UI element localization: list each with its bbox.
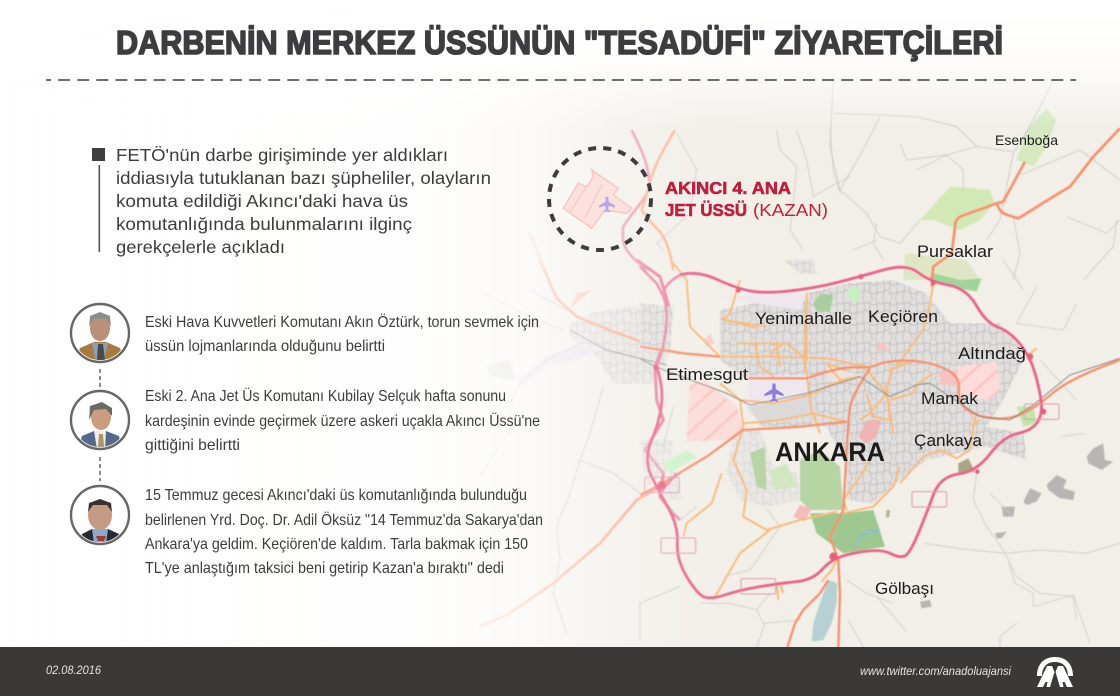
- map place labels: Mamak: [921, 389, 979, 408]
- motorway ring road: [647, 267, 1042, 598]
- footer bar: [0, 647, 1120, 696]
- intro text block: [92, 145, 491, 257]
- label: Akıncı 4. Ana Jet Üssü: [665, 178, 828, 220]
- map place labels: Pursaklar: [917, 242, 993, 261]
- title divider: [46, 79, 1076, 81]
- map place labels: Esenboğa: [995, 132, 1058, 148]
- intro paragraph: FETÖ'nün darbe girişiminde yer aldıkları: [116, 145, 448, 165]
- map place labels: Çankaya: [914, 431, 983, 450]
- map place labels: Altındağ: [958, 344, 1026, 363]
- statement: Adil Öksüz: TL'ye anlaştığım taksici beni getirip Kazan'a bıraktı" dedi: [145, 560, 504, 577]
- map place labels: ANKARA: [775, 437, 885, 467]
- label: Akıncı 4. Ana Jet Üssü: (KAZAN): [753, 200, 828, 220]
- Lake Mogan: [812, 580, 837, 642]
- dashed circle: [549, 148, 651, 250]
- statement: Adil Öksüz: Ankara'ya geldim. Keçiören'de kaldım. Tarla bakmak için 150: [145, 536, 528, 553]
- icon: Anadolu Agency logo: [1037, 657, 1073, 687]
- map region: Ankara city: [640, 260, 1120, 647]
- statement: Kubilay Selçuk: gittiğini belirtti: [145, 437, 240, 454]
- statement: Adil Öksüz: [145, 487, 543, 577]
- orange roads: [673, 263, 1037, 600]
- lakes and hills, east: [886, 443, 1113, 608]
- Akıncı air base marker: [549, 148, 651, 250]
- secondary roads: [640, 260, 1120, 647]
- label: Akıncı 4. Ana Jet Üssü: AKINCI 4. ANA: [665, 178, 791, 198]
- map fades to white on the left and top: [0, 78, 720, 647]
- bullet line: [98, 165, 100, 252]
- statement: Kubilay Selçuk: [145, 387, 540, 454]
- bullet square: [92, 148, 105, 161]
- statement: Kubilay Selçuk: kardeşinin evinde geçirmek üzere askeri uçakla Akıncı Üssü'ne: [145, 412, 540, 430]
- statement: Akın Öztürk: üssün lojmanlarında olduğunu belirtti: [145, 338, 385, 355]
- icon: Etimesgut airfield plane: [764, 383, 784, 402]
- icon: plane: [599, 197, 615, 212]
- date: 02.08.2016: [46, 665, 102, 677]
- intro paragraph: gerekçelerle açıkladı: [116, 237, 285, 257]
- intro paragraph: komutanlığında bulunmalarını ilginç: [116, 214, 412, 234]
- intro paragraph: [116, 145, 491, 257]
- statement: Adil Öksüz: 15 Temmuz gecesi Akıncı'daki üs komutanlığında bulunduğu: [145, 487, 527, 504]
- twitter address: www.twitter.com/anadoluajansi: [860, 664, 1011, 678]
- portrait: Kubilay Selçuk: [71, 391, 129, 449]
- map place labels: [666, 132, 1058, 598]
- portrait: Adil Öksüz: [71, 486, 129, 544]
- base footprint: [563, 170, 632, 228]
- map region: Kazan surroundings: [530, 130, 850, 270]
- label: Akıncı 4. Ana Jet Üssü: JET ÜSSÜ: [665, 200, 747, 220]
- intro paragraph: komuta edildiği Akıncı'daki hava üs: [116, 191, 408, 211]
- map region: western and northern outskirts: [480, 260, 680, 640]
- connector dashes between portraits: [99, 369, 101, 481]
- portrait: Akın Öztürk: [71, 304, 129, 362]
- intro paragraph: iddiasıyla tutuklanan bazı şüpheliler, olayların: [116, 168, 491, 188]
- statement: Akın Öztürk: Eski Hava Kuvvetleri Komutanı Akın Öztürk, torun sevmek için: [145, 313, 539, 331]
- map place labels: Gölbaşı: [875, 579, 934, 598]
- trunk roads: [640, 267, 1120, 647]
- map place labels: Etimesgut: [666, 365, 748, 384]
- statement: Kubilay Selçuk: Eski 2. Ana Jet Üs Komutanı Kubilay Selçuk hafta sonunu: [145, 387, 506, 405]
- statement: Adil Öksüz: belirlenen Yrd. Doç. Dr. Adil Öksüz "14 Temmuz'da Sakarya'dan: [145, 511, 543, 529]
- title: DARBENİN MERKEZ ÜSSÜNÜN "TESADÜFİ" ZİYARETÇİLERİ: [116, 24, 1003, 61]
- statement: Akın Öztürk: [145, 313, 539, 355]
- map region: Esenboğa and Pursaklar: [830, 80, 1120, 280]
- map place labels: Yenimahalle: [755, 309, 852, 328]
- map place labels: Keçiören: [868, 307, 938, 326]
